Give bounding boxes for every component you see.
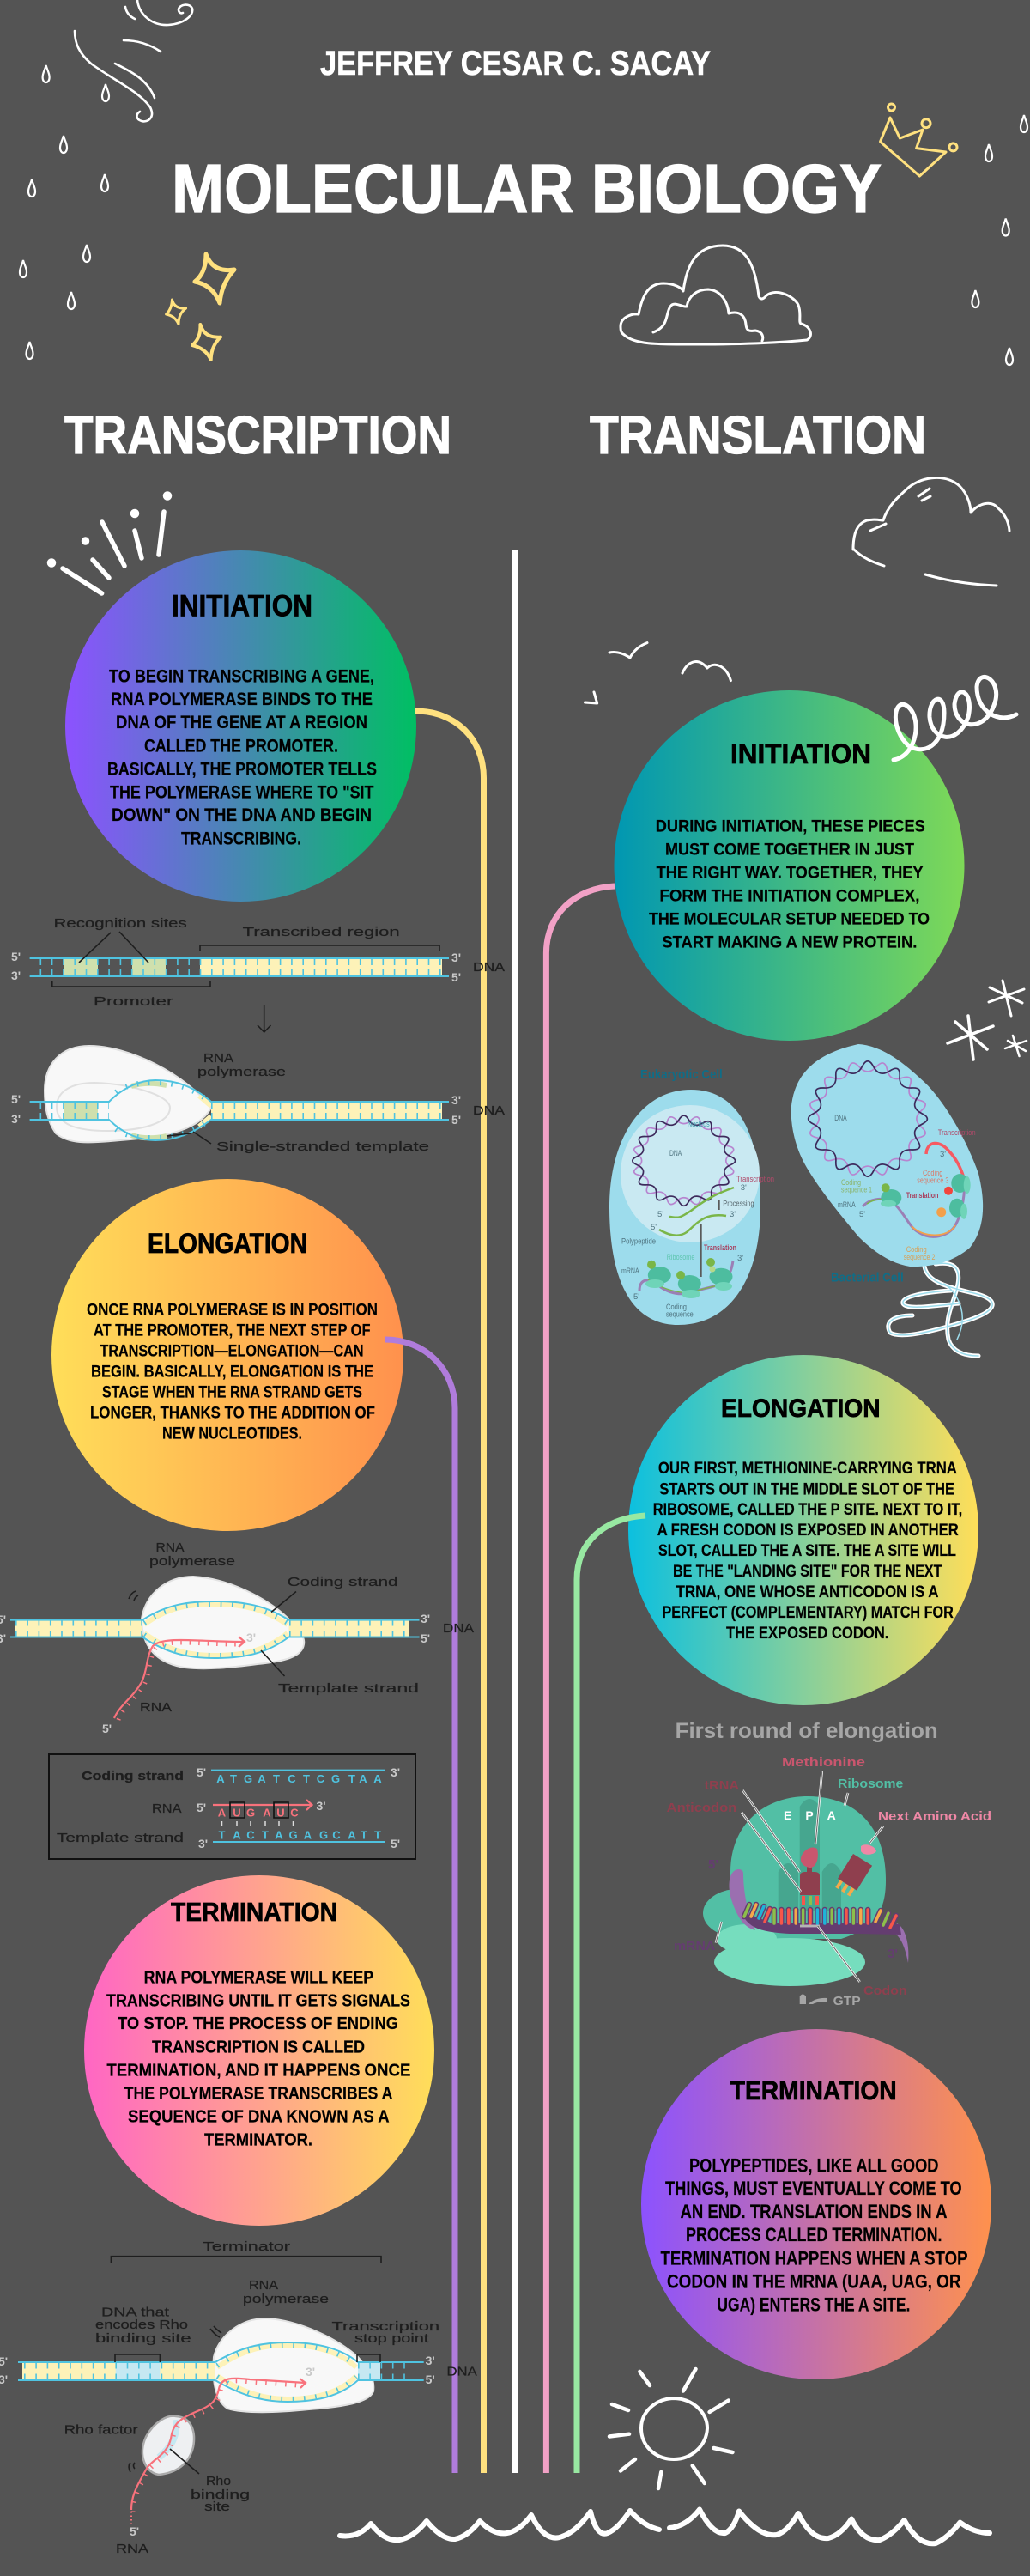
- RNA letters: U: [233, 1807, 241, 1819]
- arrows: [716, 1771, 883, 1982]
- doodle: burst lines: [50, 494, 170, 593]
- template letters: G: [319, 1829, 328, 1841]
- body text: ONCE RNA POLYMERASE IS IN POSITION: [87, 1301, 378, 1319]
- main title: MOLECULAR BIOLOGY: [172, 150, 882, 227]
- panel: strand sequence box: RNA: [152, 1801, 182, 1816]
- template letters: C: [332, 1829, 341, 1841]
- diagram: eukaryotic cell: Eukaryotic Cell: [640, 1067, 723, 1082]
- icon: cloud: [621, 246, 810, 344]
- coding letters: T: [303, 1772, 310, 1785]
- diagram: termination: binding site: [95, 2331, 191, 2346]
- diagram: promoter and transcribed region: 5': [451, 970, 461, 984]
- diagram: termination: stop point: [354, 2331, 430, 2346]
- icon: crown: [881, 104, 957, 176]
- diagram: bacterial cell: sequence 1: [841, 1185, 872, 1195]
- heading: ELONGATION: [148, 1228, 307, 1259]
- body text: FORM THE INITIATION COMPLEX,: [659, 887, 919, 906]
- panel: strand sequence box: 3': [316, 1799, 326, 1813]
- tRNA: [800, 1844, 876, 1905]
- coding letters: A: [216, 1772, 225, 1785]
- panel: strand sequence box: 5': [197, 1765, 206, 1779]
- template letters: A: [233, 1829, 241, 1841]
- diagram: termination: Transcription: [331, 2319, 439, 2334]
- diagram: promoter and transcribed region: Recognition sites: [54, 916, 187, 931]
- body text: TRNA, ONE WHOSE ANTICODON IS A: [676, 1583, 939, 1601]
- body text: THE EXPOSED CODON.: [726, 1624, 888, 1643]
- template letters: C: [246, 1829, 255, 1841]
- body text: START MAKING A NEW PROTEIN.: [662, 933, 917, 952]
- body text: OUR FIRST, METHIONINE-CARRYING TRNA: [658, 1459, 957, 1478]
- diagram: elongation bubble: 5': [421, 1631, 430, 1645]
- diagram: termination: 5': [130, 2524, 139, 2538]
- diagram: eukaryotic cell: Nucleus: [688, 1120, 710, 1129]
- diagram: elongation bubble: DNA: [443, 1621, 474, 1636]
- connector: purple line: [385, 1340, 455, 2473]
- panel: strand sequence box: 3': [391, 1765, 400, 1779]
- labels: Anticodon: [667, 1801, 736, 1815]
- panel: strand sequence box: 3': [198, 1837, 208, 1850]
- diagram: RNA polymerase on promoter: 5': [11, 1092, 21, 1106]
- template letters: T: [360, 1829, 367, 1841]
- panel: strand sequence box: Coding strand: [82, 1769, 184, 1783]
- site letters: [784, 1808, 836, 1822]
- GTP icon: [800, 1994, 827, 2004]
- diagram: RNA polymerase on promoter: DNA: [473, 1103, 505, 1118]
- diagram: termination: RNA: [249, 2278, 278, 2293]
- body text: TRANSCRIPTION IS CALLED: [152, 2037, 365, 2057]
- diagram: promoter and transcribed region: DNA: [473, 960, 505, 975]
- connector: green line: [577, 1516, 645, 2473]
- author name: JEFFREY CESAR C. SACAY: [320, 45, 711, 82]
- labels: Ribosome: [838, 1777, 903, 1791]
- diagram: eukaryotic cell: 3': [730, 1210, 736, 1219]
- body text: TERMINATION HAPPENS WHEN A STOP: [661, 2247, 968, 2269]
- diagram: termination: polymerase: [243, 2292, 329, 2306]
- diagram: termination: RNA: [116, 2542, 148, 2556]
- coding letters: C: [288, 1772, 296, 1785]
- coding letters: C: [317, 1772, 325, 1785]
- body text: STAGE WHEN THE RNA STRAND GETS: [102, 1383, 362, 1401]
- body text: SLOT, CALLED THE A SITE. THE A SITE WILL: [658, 1541, 956, 1560]
- icon: sparkles: [167, 254, 234, 360]
- panel: strand sequence box: Template strand: [57, 1831, 184, 1845]
- body text: LONGER, THANKS TO THE ADDITION OF: [90, 1404, 375, 1422]
- site letters: P: [805, 1808, 814, 1822]
- body text: STARTS OUT IN THE MIDDLE SLOT OF THE: [659, 1480, 954, 1499]
- doodle: rain drops: [20, 65, 1027, 365]
- template letters: [219, 1829, 381, 1841]
- body text: BASICALLY, THE PROMOTER TELLS: [107, 759, 377, 780]
- diagram: elongation bubble: Coding strand: [288, 1575, 398, 1589]
- diagram: RNA polymerase on promoter: 3': [451, 1093, 461, 1107]
- body text: DOWN" ON THE DNA AND BEGIN: [112, 805, 372, 825]
- diagram: eukaryotic cell: [609, 1067, 774, 1325]
- diagram: elongation bubble: 3': [246, 1631, 256, 1644]
- diagram: eukaryotic cell: 5': [633, 1292, 639, 1302]
- diagram: termination: 3': [426, 2354, 435, 2367]
- body text: RIBOSOME, CALLED THE P SITE. NEXT TO IT,: [653, 1500, 962, 1519]
- body text: NEW NUCLEOTIDES.: [162, 1425, 302, 1443]
- coding letters: T: [348, 1772, 355, 1785]
- template letters: T: [374, 1829, 381, 1841]
- body text: TO STOP. THE PROCESS OF ENDING: [118, 2014, 398, 2033]
- diagram: termination: DNA that: [101, 2305, 170, 2320]
- template letters: A: [348, 1829, 356, 1841]
- diagram: elongation bubble: polymerase: [149, 1554, 235, 1569]
- diagram: promoter and transcribed region: 3': [451, 951, 461, 964]
- diagram: bacterial cell flagellum: [888, 1263, 992, 1356]
- diagram: termination: Rho factor: [64, 2423, 138, 2438]
- coding letters: A: [258, 1772, 266, 1785]
- doodle: waves: [340, 2509, 990, 2543]
- diagram: bacterial cell: Transcription: [938, 1128, 976, 1138]
- diagram: bacterial cell: [791, 1044, 983, 1285]
- body text: TO BEGIN TRANSCRIBING A GENE,: [109, 666, 374, 687]
- diagram: eukaryotic cell: DNA: [670, 1149, 682, 1158]
- doodle: asterisks: [948, 981, 1027, 1060]
- body text: THE MOLECULAR SETUP NEEDED TO: [649, 910, 930, 929]
- site letters: E: [784, 1808, 791, 1822]
- panel: strand sequence box: 5': [197, 1801, 206, 1814]
- panel: strand sequence box: 5': [391, 1837, 400, 1850]
- doodle: cloud top right: [853, 477, 1009, 586]
- panel: transcription initiation: [65, 550, 416, 902]
- body text: AN END. TRANSLATION ENDS IN A: [680, 2201, 948, 2222]
- diagram: RNA polymerase on promoter: polymerase: [197, 1065, 286, 1079]
- diagram: elongation bubble: 3': [421, 1612, 430, 1625]
- diagram: termination: binding: [191, 2488, 250, 2502]
- diagram: promoter and transcribed region: 3': [11, 969, 21, 982]
- labels: [667, 1755, 991, 2008]
- RNA letters: C: [290, 1807, 299, 1819]
- diagram: first round of elongation: [667, 1719, 991, 2008]
- diagram: promoter and transcribed region: Transcribed region: [243, 925, 400, 939]
- diagram: RNA polymerase on promoter: 5': [451, 1113, 461, 1127]
- diagram: bacterial cell: Bacterial Cell: [831, 1271, 904, 1285]
- template letters: T: [219, 1829, 226, 1841]
- doodle: birds: [585, 643, 730, 703]
- diagram: bacterial cell: DNA: [834, 1114, 847, 1123]
- diagram: bacterial cell: Translation: [906, 1191, 939, 1200]
- diagram: elongation bubble: 5': [102, 1722, 112, 1735]
- body text: BE THE "LANDING SITE" FOR THE NEXT: [673, 1562, 942, 1581]
- diagram: termination: 5': [426, 2372, 435, 2386]
- diagram: eukaryotic cell: sequence: [666, 1310, 694, 1319]
- body text: [661, 2155, 968, 2315]
- body text: THE RIGHT WAY. TOGETHER, THEY: [657, 864, 924, 883]
- body text: MUST COME TOGETHER IN JUST: [665, 841, 914, 860]
- diagram: termination: 3': [306, 2365, 315, 2379]
- icon: sun: [609, 2369, 732, 2488]
- ribosome: [703, 1796, 886, 1986]
- diagram: RNA polymerase on promoter: RNA: [203, 1051, 233, 1066]
- labels: Methionine: [782, 1755, 865, 1770]
- body text: [107, 666, 377, 848]
- rho factor: [142, 2416, 194, 2475]
- heading: INITIATION: [730, 738, 871, 769]
- body text: TERMINATOR.: [204, 2130, 312, 2150]
- labels: tRNA: [705, 1778, 739, 1793]
- diagram: eukaryotic cell: 5': [651, 1223, 657, 1232]
- body text: CODON IN THE MRNA (UAA, UAG, OR: [667, 2270, 961, 2292]
- body text: TRANSCRIPTION—ELONGATION—CAN: [100, 1342, 364, 1360]
- diagram: bacterial cell: 3': [940, 1150, 946, 1159]
- diagram: bacterial cell: Coding: [841, 1178, 861, 1188]
- diagram: promoter and transcribed region: Promoter: [94, 994, 173, 1009]
- RNA letters: G: [246, 1807, 255, 1819]
- connector: yellow line: [415, 711, 484, 2473]
- diagram: bacterial cell: Coding: [923, 1169, 942, 1178]
- caption: First round of elongation: [676, 1719, 938, 1743]
- diagram: eukaryotic cell: Polypeptide: [621, 1236, 656, 1247]
- labels: 3': [888, 1947, 898, 1961]
- body text: PERFECT (COMPLEMENTARY) MATCH FOR: [662, 1603, 954, 1622]
- divider: center white line: [512, 550, 518, 2473]
- template letters: A: [275, 1829, 283, 1841]
- doodle: spiral: [894, 677, 1016, 760]
- diagram: eukaryotic cell: Translation: [704, 1243, 736, 1253]
- diagram: termination: DNA: [446, 2365, 477, 2379]
- mRNA: [729, 1869, 908, 1963]
- panel: transcription termination: [84, 1875, 434, 2226]
- diagram: eukaryotic cell: mRNA: [621, 1267, 639, 1276]
- diagram: eukaryotic cell: 5': [657, 1210, 663, 1219]
- coding letters: A: [359, 1772, 367, 1785]
- body text: TRANSCRIBING UNTIL IT GETS SIGNALS: [106, 1990, 410, 2011]
- diagram: promoter and transcribed region: 5': [11, 950, 21, 963]
- panel: strand sequence box: [49, 1754, 415, 1859]
- body text: [649, 817, 930, 952]
- template letters: A: [304, 1829, 312, 1841]
- site letters: A: [827, 1808, 836, 1822]
- body text: THE POLYMERASE WHERE TO "SIT: [110, 783, 374, 802]
- diagram: eukaryotic cell: Ribosome: [667, 1253, 694, 1262]
- body text: TERMINATION, AND IT HAPPENS ONCE: [106, 2061, 410, 2080]
- diagram: bacterial cell: sequence 3: [917, 1176, 948, 1185]
- diagram: termination: encodes Rho: [95, 2318, 188, 2332]
- heading: translation: TRANSLATION: [590, 406, 926, 465]
- diagram: bacterial cell: sequence 2: [904, 1253, 935, 1262]
- heading: ELONGATION: [721, 1394, 881, 1423]
- diagram: bacterial cell: 5': [859, 1210, 865, 1219]
- diagram: termination: [0, 2239, 477, 2556]
- body text: [653, 1459, 962, 1643]
- diagram: RNA polymerase on promoter: 3': [11, 1112, 21, 1126]
- body text: THINGS, MUST EVENTUALLY COME TO: [665, 2178, 962, 2199]
- coding letters: A: [373, 1772, 382, 1785]
- body text: TRANSCRIBING.: [181, 829, 301, 848]
- diagram: eukaryotic cell: 3': [737, 1254, 743, 1263]
- diagram: termination: Rho: [206, 2474, 231, 2488]
- body text: RNA POLYMERASE WILL KEEP: [144, 1967, 373, 1987]
- panel: translation termination: [641, 2029, 991, 2379]
- body text: DURING INITIATION, THESE PIECES: [656, 817, 925, 836]
- diagram: termination: Terminator: [203, 2239, 290, 2254]
- doodle: wind swirls: [75, 0, 192, 121]
- heading: INITIATION: [172, 589, 312, 623]
- diagram: bacterial cell: Coding: [906, 1245, 927, 1255]
- body text: THE POLYMERASE TRANSCRIBES A: [124, 2083, 393, 2103]
- diagram: RNA polymerase on promoter: [11, 1046, 505, 1154]
- labels: Codon: [863, 1984, 907, 1998]
- body text: AT THE PROMOTER, THE NEXT STEP OF: [94, 1321, 371, 1340]
- labels: Next Amino Acid: [878, 1809, 991, 1824]
- diagram: promoter and transcribed region: [11, 916, 505, 1032]
- diagram: termination: site: [204, 2500, 230, 2514]
- diagram: elongation bubble: Template strand: [278, 1681, 419, 1696]
- RNA letters: A: [263, 1807, 271, 1819]
- heading: TERMINATION: [730, 2075, 897, 2105]
- template letters: T: [262, 1829, 269, 1841]
- diagram: eukaryotic cell: 3': [741, 1183, 747, 1193]
- body text: UGA) ENTERS THE A SITE.: [717, 2293, 910, 2315]
- body text: CALLED THE PROMOTER.: [144, 737, 338, 756]
- body text: [87, 1301, 378, 1443]
- coding letters: [216, 1772, 382, 1785]
- heading: transcription: TRANSCRIPTION: [64, 406, 451, 465]
- body text: SEQUENCE OF DNA KNOWN AS A: [128, 2107, 390, 2126]
- body text: A FRESH CODON IS EXPOSED IN ANOTHER: [657, 1521, 959, 1540]
- panel: transcription elongation: [52, 1179, 403, 1531]
- RNA letters: U: [276, 1807, 285, 1819]
- diagram: bacterial cell: mRNA: [838, 1200, 856, 1210]
- body text: PROCESS CALLED TERMINATION.: [686, 2224, 942, 2245]
- body text: [106, 1967, 410, 2150]
- RNA letters: A: [218, 1807, 227, 1819]
- RNA strand: [131, 2379, 306, 2510]
- labels: mRNA: [674, 1939, 715, 1953]
- RNA letters: [218, 1807, 299, 1819]
- diagram: elongation bubble: [0, 1540, 474, 1735]
- labels: 5': [708, 1857, 718, 1872]
- coding letters: G: [244, 1772, 252, 1785]
- coding letters: G: [331, 1772, 340, 1785]
- diagram: eukaryotic cell: Coding: [666, 1303, 687, 1312]
- RNA strand: [114, 1637, 245, 1718]
- diagram: elongation bubble: RNA: [156, 1540, 184, 1555]
- diagram: eukaryotic cell: Transcription: [736, 1175, 774, 1184]
- body text: POLYPEPTIDES, LIKE ALL GOOD: [689, 2155, 939, 2177]
- body text: BEGIN. BASICALLY, ELONGATION IS THE: [91, 1363, 373, 1381]
- body text: RNA POLYMERASE BINDS TO THE: [111, 690, 373, 709]
- template letters: G: [288, 1829, 298, 1841]
- diagram: eukaryotic cell: Processing: [723, 1199, 754, 1209]
- panel: translation initiation: [615, 690, 965, 1041]
- heading: TERMINATION: [171, 1897, 337, 1927]
- coding letters: T: [230, 1772, 237, 1785]
- body text: DNA OF THE GENE AT A REGION: [116, 713, 367, 732]
- connector: pink line: [546, 886, 615, 2473]
- panel: translation elongation: [628, 1355, 978, 1705]
- diagram: elongation bubble: RNA: [140, 1700, 172, 1715]
- coding letters: T: [273, 1772, 280, 1785]
- labels: GTP: [833, 1994, 861, 2008]
- diagram: RNA polymerase on promoter: Single-stranded template: [216, 1139, 429, 1154]
